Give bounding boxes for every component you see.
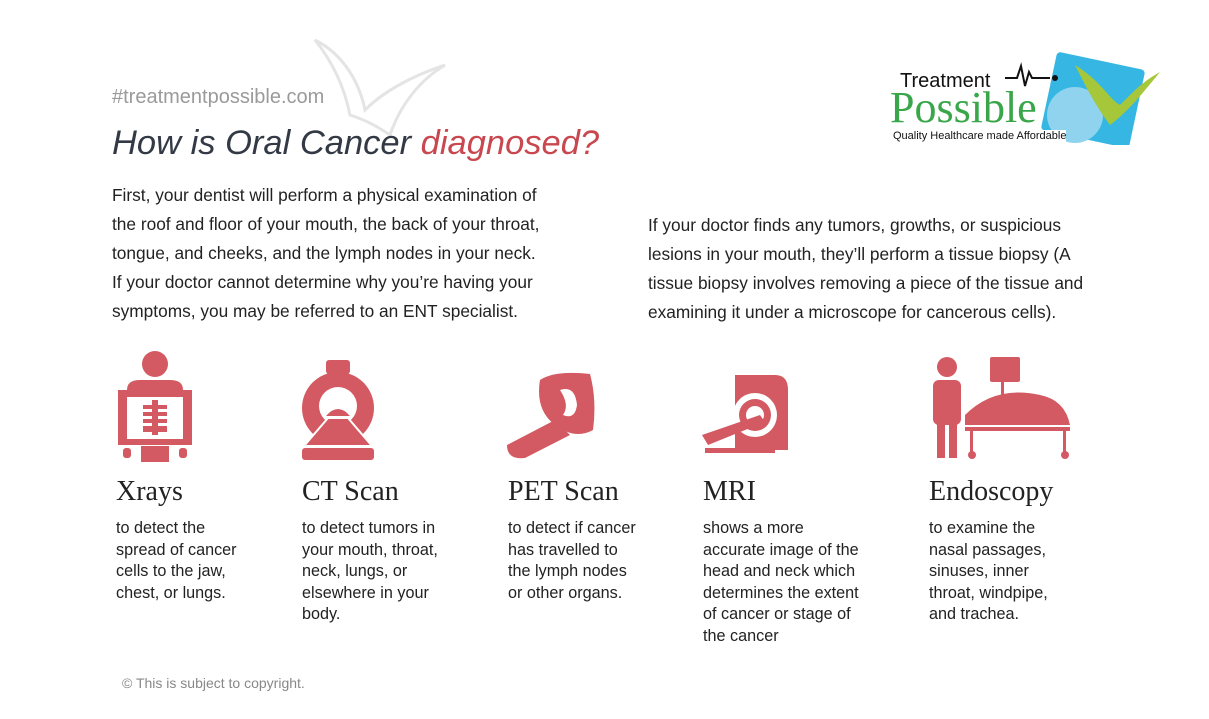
column: pet scan: has travelled to: [508, 540, 618, 558]
icon: xray: [118, 351, 192, 462]
column: mri: head and neck which: [703, 562, 855, 580]
icon: endoscopy: [933, 357, 1070, 459]
column: mri: accurate image of the: [703, 540, 859, 558]
column: endoscopy: throat, windpipe,: [929, 584, 1048, 602]
column: xrays: [116, 476, 237, 602]
column: ct scan: elsewhere in your: [302, 584, 429, 602]
column: endoscopy: and trachea.: [929, 605, 1019, 623]
column: mri: [703, 476, 859, 644]
column: xrays: cells to the jaw,: [116, 562, 226, 580]
intro paragraph right: examining it under a microscope for cancerous cells).: [648, 302, 1056, 322]
copyright: © This is subject to copyright.: [122, 675, 305, 691]
intro paragraph left: the roof and floor of your mouth, the back of your throat,: [112, 214, 539, 234]
intro paragraph left: If your doctor cannot determine why you’re having your: [112, 272, 533, 292]
column: xrays: Xrays: [116, 476, 183, 507]
column: ct scan: [302, 476, 438, 623]
column: ct scan: CT Scan: [302, 476, 399, 507]
intro paragraph left: First, your dentist will perform a physical examination of: [112, 185, 537, 205]
column: mri: the cancer: [703, 626, 779, 644]
column: xrays: spread of cancer: [116, 540, 237, 558]
column: endoscopy: [929, 476, 1054, 623]
column: mri: shows a more: [703, 519, 804, 537]
column: pet scan: or other organs.: [508, 584, 622, 602]
column: endoscopy: to examine the: [929, 519, 1035, 537]
column: ct scan: body.: [302, 605, 340, 623]
logo: Quality Healthcare made Affordable: [893, 130, 1066, 142]
intro paragraph right: lesions in your mouth, they’ll perform a tissue biopsy (A: [648, 244, 1071, 264]
column: xrays: chest, or lungs.: [116, 584, 226, 602]
column: pet scan: PET Scan: [508, 476, 619, 507]
column: mri: determines the extent: [703, 584, 859, 602]
decorative bird watermark: [314, 38, 446, 136]
column: xrays: to detect the: [116, 519, 205, 537]
column: endoscopy: sinuses, inner: [929, 562, 1029, 580]
icon: ct scan: [302, 360, 374, 460]
title: How is Oral Cancer diagnosed?: [112, 124, 599, 162]
intro paragraph left: [112, 185, 539, 321]
column: pet scan: to detect if cancer: [508, 519, 636, 537]
column: pet scan: [508, 476, 636, 602]
column: endoscopy: Endoscopy: [929, 476, 1053, 507]
intro paragraph right: tissue biopsy involves removing a piece of the tissue and: [648, 273, 1083, 293]
column: pet scan: the lymph nodes: [508, 562, 627, 580]
column: ct scan: your mouth, throat,: [302, 540, 438, 558]
logo: Treatment: [900, 70, 990, 92]
intro paragraph left: symptoms, you may be referred to an ENT specialist.: [112, 301, 518, 321]
site url: #treatmentpossible.com: [112, 86, 324, 108]
column: ct scan: to detect tumors in: [302, 519, 435, 537]
icon: pet scan: [507, 372, 594, 458]
intro paragraph right: [648, 215, 1083, 322]
column: mri: of cancer or stage of: [703, 605, 851, 623]
column: ct scan: neck, lungs, or: [302, 562, 407, 580]
column: mri: MRI: [703, 476, 756, 507]
logo: [890, 52, 1160, 145]
icon: mri: [702, 375, 788, 453]
logo: Possible: [890, 83, 1037, 132]
intro paragraph right: If your doctor finds any tumors, growths, or suspicious: [648, 215, 1061, 235]
column: endoscopy: nasal passages,: [929, 540, 1046, 558]
intro paragraph left: tongue, and cheeks, and the lymph nodes in your neck.: [112, 243, 536, 263]
